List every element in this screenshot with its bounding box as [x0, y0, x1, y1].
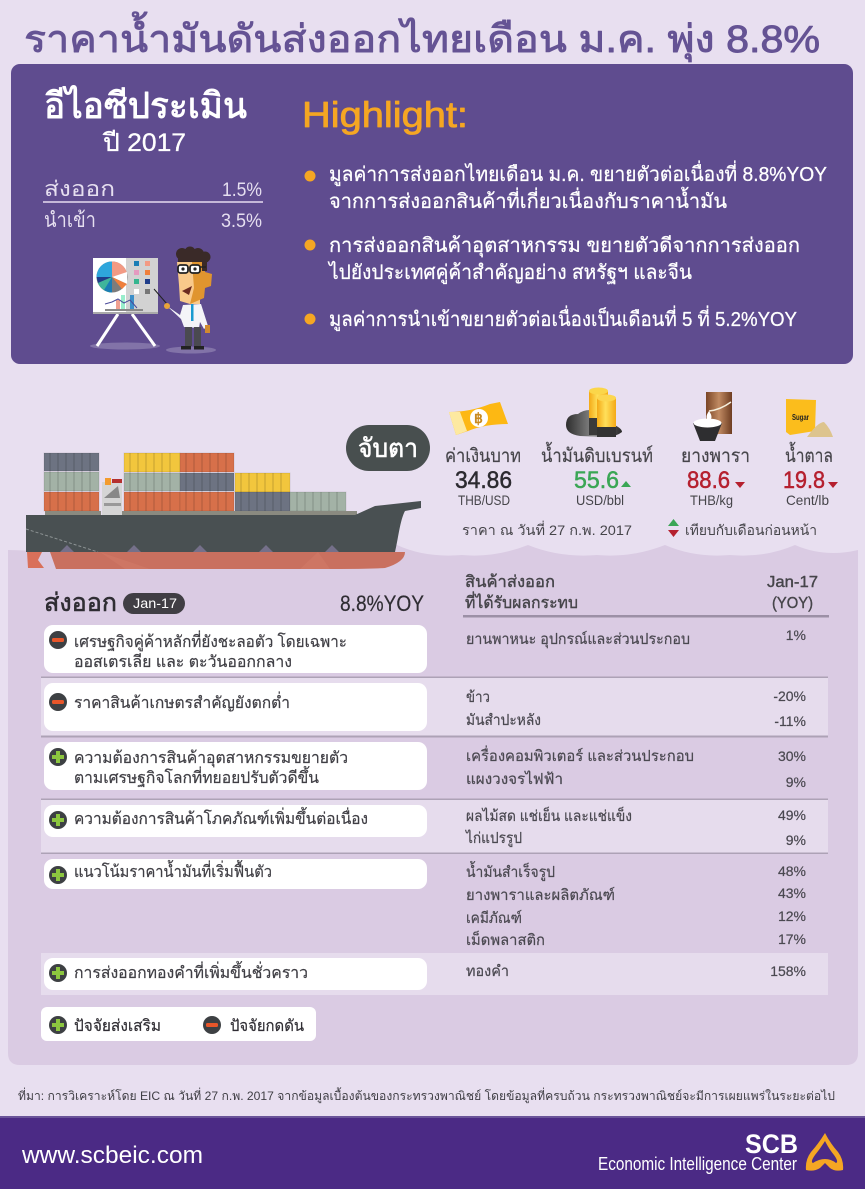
- metric: baht: 34.86: [455, 467, 512, 494]
- highlight bullets: [304, 160, 827, 332]
- metric: rubber: 88.6: [687, 467, 730, 494]
- exports heading: Jan-17: [133, 595, 177, 611]
- forecast heading: อีไอซีประเมิน: [44, 85, 247, 126]
- table: yoy values: 158%: [770, 963, 806, 979]
- table: affected products: ทองคำ: [466, 963, 509, 980]
- table: yoy values: 17%: [778, 931, 806, 947]
- factor: low farm prices: [44, 683, 427, 731]
- website: www.scbeic.com: [21, 1142, 203, 1169]
- metric: baht: [445, 446, 521, 508]
- forecast figures: [43, 178, 263, 232]
- table: affected products: [465, 631, 694, 980]
- icon: sugar bag: [786, 399, 833, 437]
- table: yoy values: 1%: [786, 627, 806, 643]
- table: affected products: เครื่องคอมพิวเตอร์ และส่วนประกอบ: [466, 745, 694, 765]
- forecast figures: 3.5%: [221, 211, 262, 232]
- badge: watch: [346, 425, 430, 471]
- icon: SCB logo: [806, 1133, 843, 1171]
- illustration: container ship: [26, 453, 421, 569]
- factor: oil price trend: [44, 859, 427, 889]
- factor: industrial demand: ตามเศรษฐกิจโลกที่ทยอยปรับตัวดีขึ้น: [74, 766, 319, 787]
- factor: industrial demand: ความต้องการสินค้าอุตสาหกรรมขยายตัว: [74, 749, 348, 768]
- legend: factors: ปัจจัยส่งเสริม: [74, 1018, 161, 1035]
- table: yoy values: 48%: [778, 863, 806, 879]
- table: yoy values: 30%: [778, 748, 806, 764]
- factor: low farm prices: ราคาสินค้าเกษตรสำคัญยังตกต่ำ: [74, 691, 290, 712]
- exports heading: 8.8%YOY: [340, 591, 424, 616]
- highlight bullets: มูลค่าการส่งออกไทยเดือน ม.ค. ขยายตัวต่อเนื่องที่ 8.8%YOY: [329, 160, 827, 187]
- table: yoy values: -20%: [773, 688, 806, 704]
- highlight bullets: มูลค่าการนำเข้าขยายตัวต่อเนื่องเป็นเดือนที่ 5 ที่ 5.2%YOY: [329, 305, 797, 332]
- table header: (YOY): [772, 595, 813, 612]
- table: affected products: ข้าว: [466, 689, 490, 706]
- metric: sugar: [783, 442, 838, 508]
- icon: sugar bag: Sugar: [792, 413, 809, 422]
- table: yoy values: 43%: [778, 885, 806, 901]
- forecast heading: ปี 2017: [102, 129, 186, 157]
- factor: consumer goods demand: [44, 805, 427, 837]
- badge: watch: จับตา: [358, 433, 418, 463]
- table: affected products: เม็ดพลาสติก: [466, 930, 545, 949]
- source note: ที่มา: การวิเคราะห์โดย EIC ณ วันที่ 27 ก.พ. 2017 จากข้อมูลเบื้องต้นของกระทรวงพาณิชย์ โดยข้อมูลที่ครบถ้วน กระทรวงพาณิชย์จะมีการเผยแพร่ในระยะต่อไป: [18, 1087, 835, 1104]
- table: affected products: เคมีภัณฑ์: [466, 910, 522, 927]
- table: affected products: ผลไม้สด แช่เย็น และแช่แข็ง: [466, 806, 632, 825]
- brand name: [598, 1129, 798, 1174]
- highlight bullets: การส่งออกสินค้าอุตสาหกรรม ขยายตัวดีจากการส่งออก: [329, 235, 800, 258]
- highlight bullets: ไปยังประเทศคู่ค้าสำคัญอย่าง สหรัฐฯ และจีน: [327, 261, 692, 285]
- table row stripes: [41, 615, 829, 995]
- factor: consumer goods demand: ความต้องการสินค้าโภคภัณฑ์เพิ่มขึ้นต่อเนื่อง: [74, 807, 368, 828]
- table: affected products: แผงวงจรไฟฟ้า: [466, 770, 563, 788]
- forecast figures: 1.5%: [222, 180, 262, 201]
- table: yoy values: [770, 627, 806, 979]
- price date note: ราคา ณ วันที่ 27 ก.พ. 2017: [462, 521, 632, 538]
- metric: brent crude: น้ำมันดิบเบรนท์: [541, 442, 653, 467]
- icon: baht banknote: [449, 402, 508, 435]
- table: yoy values: 9%: [786, 832, 806, 848]
- brand name: SCB: [745, 1129, 798, 1159]
- metric: brent crude: 55.6: [574, 467, 619, 494]
- factor: industrial demand: [44, 742, 427, 790]
- metric: sugar: Cent/lb: [786, 492, 829, 508]
- factor: gold exports: [44, 958, 427, 990]
- exports heading: [44, 589, 424, 617]
- metric: rubber: THB/kg: [690, 492, 733, 508]
- highlight heading: Highlight:: [302, 94, 468, 135]
- highlight bullets: จากการส่งออกสินค้าที่เกี่ยวเนื่องกับราคาน้ำมัน: [329, 187, 727, 213]
- table: yoy values: -11%: [774, 713, 806, 729]
- metric: baht: THB/USD: [458, 492, 510, 508]
- table: affected products: ยางพาราและผลิตภัณฑ์: [466, 887, 615, 904]
- icon: baht banknote: ฿: [474, 410, 483, 426]
- factor: gold exports: การส่งออกทองคำที่เพิ่มขึ้นชั่วคราว: [74, 961, 308, 982]
- footer: [0, 1116, 865, 1189]
- table: affected products: มันสำปะหลัง: [466, 712, 541, 729]
- table header: ที่ได้รับผลกระทบ: [465, 591, 578, 612]
- legend: factors: ปัจจัยกดดัน: [230, 1018, 304, 1035]
- panel: forecast and highlight: [11, 64, 853, 364]
- icon: rubber tapping: [693, 392, 732, 441]
- metric: rubber: [681, 446, 750, 508]
- table: affected products: ไก่แปรรูป: [465, 829, 522, 847]
- legend: comparison arrows: เทียบกับเดือนก่อนหน้า: [685, 522, 817, 538]
- table: affected products: ยานพาหนะ อุปกรณ์และส่วนประกอบ: [466, 631, 690, 649]
- metric: rubber: ยางพารา: [681, 446, 750, 467]
- title: ราคาน้ำมันดันส่งออกไทยเดือน ม.ค. พุ่ง 8.8%: [24, 11, 820, 62]
- exports heading: ส่งออก: [44, 589, 117, 617]
- panel: exports: [8, 545, 858, 1065]
- table header: [465, 573, 818, 612]
- metric: brent crude: [541, 442, 653, 508]
- factor: weak trade partners: ออสเตรเลีย และ ตะวันออกกลาง: [74, 653, 292, 671]
- brand name: Economic Intelligence Center: [598, 1154, 797, 1174]
- table: yoy values: 49%: [778, 807, 806, 823]
- table: affected products: น้ำมันสำเร็จรูป: [466, 861, 555, 881]
- legend: factors: [41, 1007, 316, 1041]
- table header: สินค้าส่งออก: [465, 573, 555, 591]
- factor: weak trade partners: เศรษฐกิจคู่ค้าหลักที่ยังชะลอตัว โดยเฉพาะ: [74, 630, 347, 652]
- metric: baht: ค่าเงินบาท: [445, 446, 521, 467]
- table header: Jan-17: [767, 574, 818, 591]
- factor: weak trade partners: [44, 625, 427, 673]
- table: yoy values: 9%: [786, 774, 806, 790]
- icon: brent oil barrels: [566, 388, 622, 437]
- forecast figures: ส่งออก: [44, 178, 115, 201]
- metric: sugar: 19.8: [783, 467, 825, 494]
- metric: brent crude: USD/bbl: [576, 492, 624, 508]
- icon: presenter with chart board: [90, 246, 216, 354]
- table: yoy values: 12%: [778, 908, 806, 924]
- metric: sugar: น้ำตาล: [785, 442, 833, 467]
- factor: oil price trend: แนวโน้มราคาน้ำมันที่เริ่มฟื้นตัว: [74, 860, 272, 881]
- forecast heading: [44, 85, 247, 157]
- forecast figures: นำเข้า: [44, 209, 96, 232]
